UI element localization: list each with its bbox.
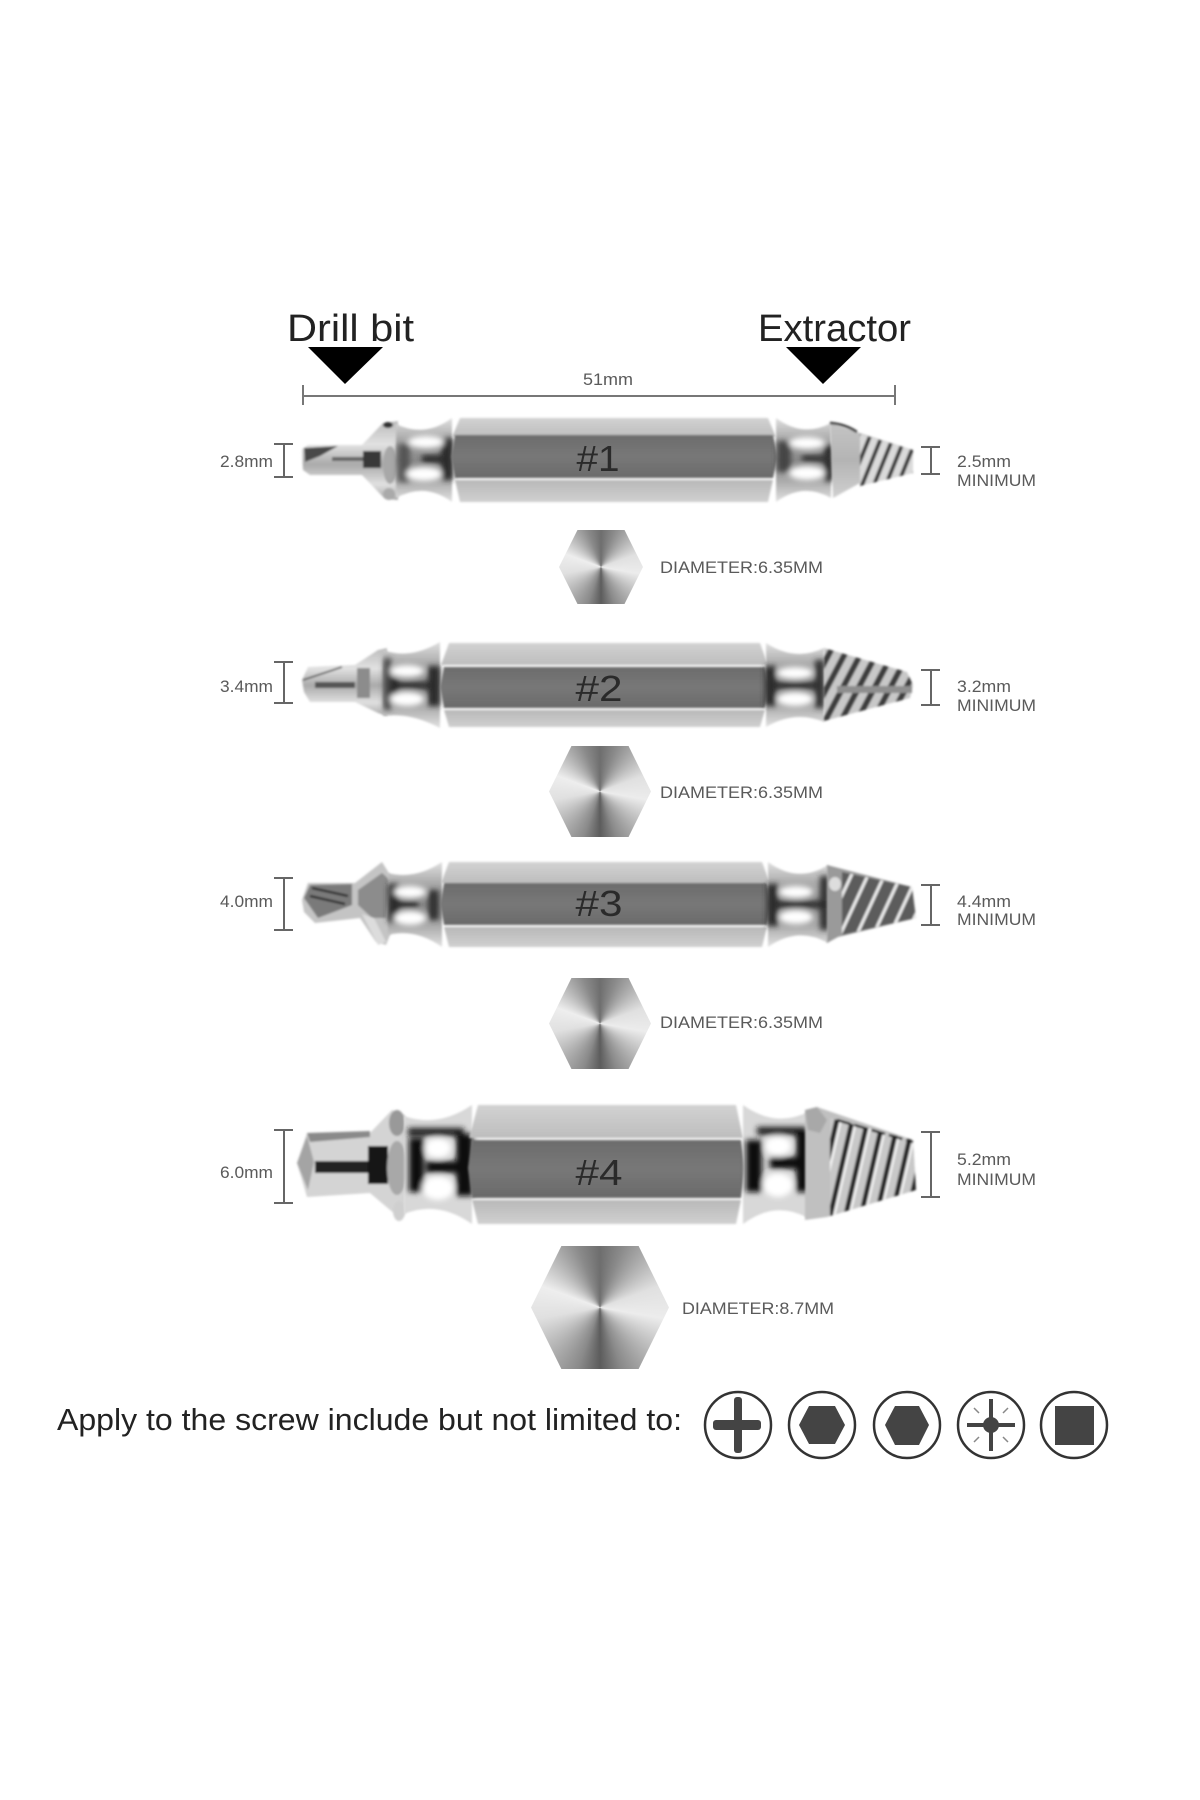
right neck 4 — [743, 1105, 811, 1224]
bit 3 — [220, 862, 1036, 1032]
right size 5.2mm minimum: MINIMUM — [957, 1170, 1036, 1189]
bit 4 — [220, 1105, 1036, 1318]
right size 3.2mm minimum: 3.2mm — [957, 677, 1011, 696]
extractor tip 3 — [827, 865, 916, 943]
left size 3.4mm — [220, 662, 293, 703]
hex shank 1 — [451, 418, 778, 502]
label: #3: #3 — [576, 883, 622, 924]
right size 4.4mm minimum: 4.4mm — [957, 892, 1011, 911]
hex shank 4 — [468, 1105, 745, 1224]
right size 2.5mm minimum — [921, 447, 1036, 490]
extractor tip 4 — [805, 1107, 916, 1220]
right size 4.4mm minimum — [921, 885, 1036, 929]
icon: large hex screw — [874, 1392, 940, 1458]
hex cross-section 4 — [531, 1246, 669, 1369]
left size 2.8mm: 2.8mm — [220, 452, 273, 471]
extractor tip 2 — [824, 648, 913, 721]
drill tip 4 — [297, 1110, 407, 1221]
left size 3.4mm: 3.4mm — [220, 677, 273, 696]
hex cross-section 1 — [559, 530, 643, 604]
right size 2.5mm minimum: MINIMUM — [957, 471, 1036, 490]
right size 3.2mm minimum — [921, 670, 1036, 715]
hex shank 2 — [440, 643, 769, 727]
infographic page — [57, 314, 1108, 1460]
arrow: extractor pointer — [786, 347, 861, 384]
diameter label 1: DIAMETER:6.35MM — [660, 558, 823, 577]
arrow: drill bit pointer — [308, 347, 383, 384]
left size 4.0mm — [220, 878, 293, 930]
left size 6.0mm — [220, 1130, 293, 1203]
caption: screw types: Apply to the screw include but not limited to: — [57, 1402, 682, 1437]
label: #4: #4 — [576, 1152, 622, 1193]
left size 6.0mm: 6.0mm — [220, 1163, 273, 1182]
heading: Extractor: Extractor — [758, 308, 911, 350]
bit 2 — [220, 642, 1036, 802]
diameter label 4: DIAMETER:8.7MM — [682, 1299, 834, 1318]
label: #1: #1 — [576, 438, 620, 479]
left neck 2 — [383, 642, 440, 728]
left neck 3 — [388, 862, 442, 947]
left size 4.0mm: 4.0mm — [220, 892, 273, 911]
hex cross-section 3 — [549, 978, 651, 1069]
right size 3.2mm minimum: MINIMUM — [957, 696, 1036, 715]
left neck 4 — [404, 1105, 473, 1224]
diameter label 3: DIAMETER:6.35MM — [660, 1013, 823, 1032]
icon: square screw — [1041, 1392, 1107, 1458]
right neck 3 — [767, 862, 829, 947]
hex shank 3 — [440, 862, 771, 947]
left neck 1 — [396, 418, 453, 502]
icon: phillips screw — [705, 1392, 771, 1458]
drill tip 1 — [302, 421, 398, 500]
dimension: overall length 51mm: 51mm — [583, 370, 633, 389]
label: #2: #2 — [576, 668, 622, 709]
diameter label 2: DIAMETER:6.35MM — [660, 783, 823, 802]
heading: Drill bit: Drill bit — [287, 308, 414, 350]
drill tip 2 — [302, 648, 387, 716]
icon: pozidriv screw — [958, 1392, 1024, 1458]
hex cross-section 2 — [549, 746, 651, 837]
icon: hex screw — [789, 1392, 855, 1458]
right size 4.4mm minimum: MINIMUM — [957, 910, 1036, 929]
right neck 2 — [765, 643, 824, 727]
right size 5.2mm minimum: 5.2mm — [957, 1150, 1011, 1169]
right size 2.5mm minimum: 2.5mm — [957, 452, 1011, 471]
drill tip 3 — [302, 862, 392, 945]
right size 5.2mm minimum — [921, 1132, 1036, 1197]
dimension: overall length 51mm — [303, 370, 895, 405]
right neck 1 — [776, 418, 833, 502]
left size 2.8mm — [220, 444, 293, 477]
extractor tip 1 — [830, 423, 913, 498]
bit 1 — [220, 418, 1036, 577]
